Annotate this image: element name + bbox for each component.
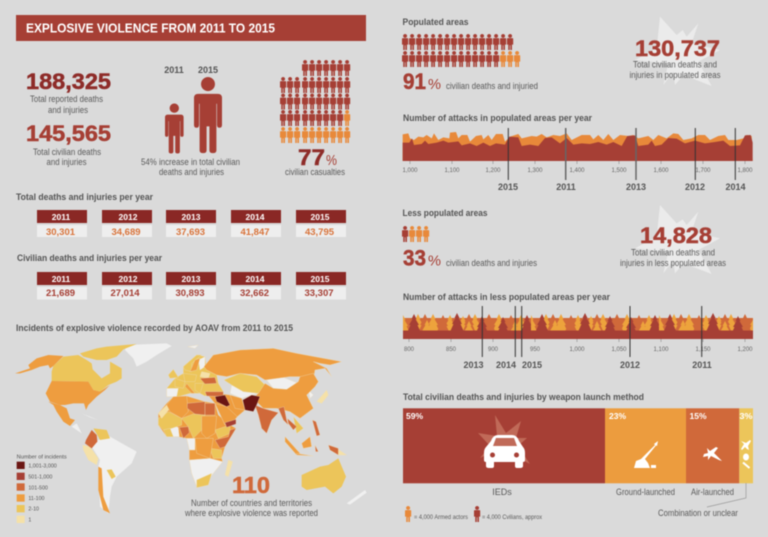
table: civilian deaths and injuries per year: 33,307 <box>304 288 334 299</box>
map legend <box>17 454 67 523</box>
stat: total reported <box>26 69 111 115</box>
segment: IEDs <box>403 408 605 497</box>
forest chart: attacks in less populated areas: 2015 <box>522 360 542 370</box>
forest chart: attacks in less populated areas: 1,050 <box>611 347 627 353</box>
table: civilian deaths and injuries per year: 2014 <box>246 274 265 284</box>
stat: 110 countries: Number of countries and territories <box>191 498 312 508</box>
forest chart: attacks in less populated areas: 900 <box>488 347 499 353</box>
pictogram: civilian casualties: civilian casualties <box>285 167 345 177</box>
forest chart: attacks in less populated areas: 850 <box>446 347 457 353</box>
segment: combination or unclear: Combination or unclear <box>658 508 738 518</box>
skyline chart: attacks in populated areas: 2015 <box>498 182 518 192</box>
stat: total civilian: Total civilian deaths <box>33 147 101 157</box>
forest chart: attacks in less populated areas: 1,100 <box>653 347 669 353</box>
legend: person scale <box>405 506 542 522</box>
figure comparison 2011 to 2015: 2011 <box>164 65 184 75</box>
figure comparison 2011 to 2015: 54% increase in total civilian <box>141 157 240 167</box>
stat: 110 countries: where explosive violence was reported <box>184 508 318 518</box>
region: Yemen <box>225 419 236 427</box>
stat: 130,737 with starburst: 130,737 <box>635 36 720 61</box>
skyline chart: attacks in populated areas: 1,300 <box>527 168 543 174</box>
table: civilian deaths and injuries per year: 30,893 <box>175 288 205 299</box>
stat: 14,828 with starburst <box>620 205 726 274</box>
base land: Africa, Europe, Middle East <box>158 355 245 487</box>
legend: person scale: = 4,000 Cvilians, approx <box>482 515 542 521</box>
pictogram: populated areas: 91 <box>403 69 426 94</box>
skyline chart: attacks in populated areas: 2013 <box>626 182 646 192</box>
stat: total reported: and injuries <box>48 105 88 115</box>
figure comparison 2011 to 2015 <box>141 65 240 177</box>
stat: 130,737 with starburst <box>630 17 721 86</box>
segment: IEDs: 59% <box>406 411 423 421</box>
skyline chart: attacks in populated areas: 2012 <box>685 182 705 192</box>
heading: attacks in populated areas: Number of attacks in populated areas per year <box>403 113 592 123</box>
table: civilian deaths and injuries per year: 2015 <box>311 274 330 284</box>
forest chart: attacks in less populated areas: 1,150 <box>695 347 711 353</box>
table: total deaths and injuries per year <box>16 192 346 238</box>
icon: missile launcher <box>634 441 658 468</box>
segment: combination or unclear <box>658 408 753 518</box>
segment: air-launched: Air-launched <box>691 487 734 497</box>
forest chart: attacks in less populated areas: 2014 <box>496 360 516 370</box>
pictogram: less populated areas <box>402 226 537 270</box>
pictogram: populated areas: % <box>428 76 441 93</box>
pictogram: less populated areas: 33 <box>403 246 426 270</box>
skyline chart: attacks in populated areas: 1,600 <box>653 168 669 174</box>
map legend: 501-1,000 <box>28 474 52 480</box>
table: total deaths and injuries per year: 2013 <box>182 212 201 222</box>
pictogram: less populated areas: civilian deaths and injuries <box>446 258 537 268</box>
stat: 130,737 with starburst: Total civilian deaths and <box>633 60 717 70</box>
segment: IEDs: IEDs <box>492 487 512 497</box>
skyline chart: attacks in populated areas: 1,200 <box>485 168 501 174</box>
table: civilian deaths and injuries per year: 32,662 <box>240 288 269 299</box>
heading: attacks in less populated areas: Number of attacks in less populated areas per year <box>403 292 610 302</box>
stat: 130,737 with starburst: injuries in populated areas <box>630 70 721 80</box>
pictogram: civilian casualties: 77 <box>298 145 325 170</box>
table: civilian deaths and injuries per year: Civilian deaths and injuries per year <box>17 253 162 263</box>
icon: car bomb <box>478 415 530 468</box>
map heading: Incidents of explosive violence recorded by AOAV from 2011 to 2015 <box>16 323 293 333</box>
stat: 110 countries: 110 <box>232 472 270 498</box>
table: total deaths and injuries per year: 2015 <box>311 212 330 222</box>
skyline chart: attacks in populated areas: 1,500 <box>611 168 627 174</box>
pictogram: civilian casualties: % <box>326 152 337 169</box>
table: total deaths and injuries per year: 2011 <box>52 212 70 222</box>
map legend: 2-10 <box>28 507 39 513</box>
table: total deaths and injuries per year: 2014 <box>246 212 265 222</box>
stat: 110 countries <box>184 472 318 518</box>
figure comparison 2011 to 2015: deaths and injuries <box>159 167 224 177</box>
pictogram: less populated areas: % <box>428 252 441 270</box>
skyline chart: attacks in populated areas: 1,400 <box>569 168 585 174</box>
forest chart: attacks in less populated areas: 950 <box>530 347 541 353</box>
world map <box>15 343 367 513</box>
table: civilian deaths and injuries per year <box>17 253 346 300</box>
skyline chart: attacks in populated areas: 1,000 <box>402 168 418 174</box>
heading: less populated areas: Less populated areas <box>402 208 488 218</box>
map legend: 1,001-3,000 <box>28 463 57 469</box>
stat: total reported: 188,325 <box>26 69 111 94</box>
table: total deaths and injuries per year: 37,693 <box>176 227 205 238</box>
table: total deaths and injuries per year: 34,689 <box>111 227 141 238</box>
table: total deaths and injuries per year: 41,847 <box>240 227 270 238</box>
icon: plane <box>703 447 722 461</box>
skyline chart: attacks in populated areas <box>402 128 753 192</box>
stat: 14,828 with starburst: Total civilian deaths and <box>631 248 715 258</box>
skyline chart: attacks in populated areas: 1,700 <box>695 168 711 174</box>
map legend: 101-500 <box>28 485 48 491</box>
forest chart: attacks in less populated areas <box>403 306 753 370</box>
skyline chart: attacks in populated areas: 2014 <box>725 182 746 192</box>
heading: weapon launch method: Total civilian deaths and injuries by weapon launch method <box>403 392 644 402</box>
title banner: EXPLOSIVE VIOLENCE FROM 2011 TO 2015 <box>26 20 275 36</box>
map legend: 11-100 <box>28 496 45 502</box>
table: civilian deaths and injuries per year: 2013 <box>182 274 201 284</box>
heading: populated areas: Populated areas <box>402 17 468 27</box>
table: total deaths and injuries per year: Total deaths and injuries per year <box>16 192 153 202</box>
table: total deaths and injuries per year: 30,301 <box>46 227 76 238</box>
skyline chart: attacks in populated areas: 2011 <box>556 182 576 192</box>
stat: total reported: Total reported deaths <box>30 94 103 104</box>
skyline chart: attacks in populated areas: 1,100 <box>444 168 460 174</box>
forest chart: attacks in less populated areas: 1,200 <box>737 347 753 353</box>
segment: air-launched: 15% <box>690 411 707 421</box>
title banner <box>16 15 366 41</box>
forest chart: attacks in less populated areas: 800 <box>404 347 415 353</box>
pictogram: populated areas <box>402 34 538 94</box>
table: civilian deaths and injuries per year: 21,689 <box>46 288 75 299</box>
Americas and southern landmasses <box>15 343 367 513</box>
segment: air-launched <box>686 408 739 497</box>
stat: total civilian: and injuries <box>46 157 87 167</box>
table: civilian deaths and injuries per year: 2011 <box>52 274 70 284</box>
segment: ground-launched: Ground-launched <box>616 487 675 497</box>
forest chart: attacks in less populated areas: 2013 <box>463 360 484 370</box>
segment: combination or unclear: 3% <box>740 411 753 421</box>
skyline chart: attacks in populated areas: 1,800 <box>737 168 753 174</box>
map legend: 1 <box>28 517 31 523</box>
map legend: Number of incidents <box>17 454 67 460</box>
segment: ground-launched <box>605 408 686 497</box>
table: civilian deaths and injuries per year: 2012 <box>119 274 138 284</box>
table: total deaths and injuries per year: 43,795 <box>305 227 335 238</box>
table: civilian deaths and injuries per year: 27,014 <box>110 288 140 299</box>
table: total deaths and injuries per year: 2012 <box>119 212 138 222</box>
stat: 14,828 with starburst: injuries in less populated areas <box>620 258 726 268</box>
Eurasia and Africa <box>158 345 347 488</box>
stat: 14,828 with starburst: 14,828 <box>640 223 712 248</box>
stat: total civilian: 145,565 <box>26 121 111 146</box>
forest chart: attacks in less populated areas: 2012 <box>620 360 640 370</box>
stat: total civilian <box>26 121 111 167</box>
forest chart: attacks in less populated areas: 2011 <box>692 360 712 370</box>
forest chart: attacks in less populated areas: 1,000 <box>569 347 585 353</box>
legend: person scale: = 4,000 Armed actors <box>414 515 468 521</box>
pictogram: populated areas: civilian deaths and injuried <box>446 81 538 91</box>
pictogram: civilian casualties <box>280 60 350 177</box>
segment: ground-launched: 23% <box>609 411 626 421</box>
figure comparison 2011 to 2015: 2015 <box>198 65 218 75</box>
